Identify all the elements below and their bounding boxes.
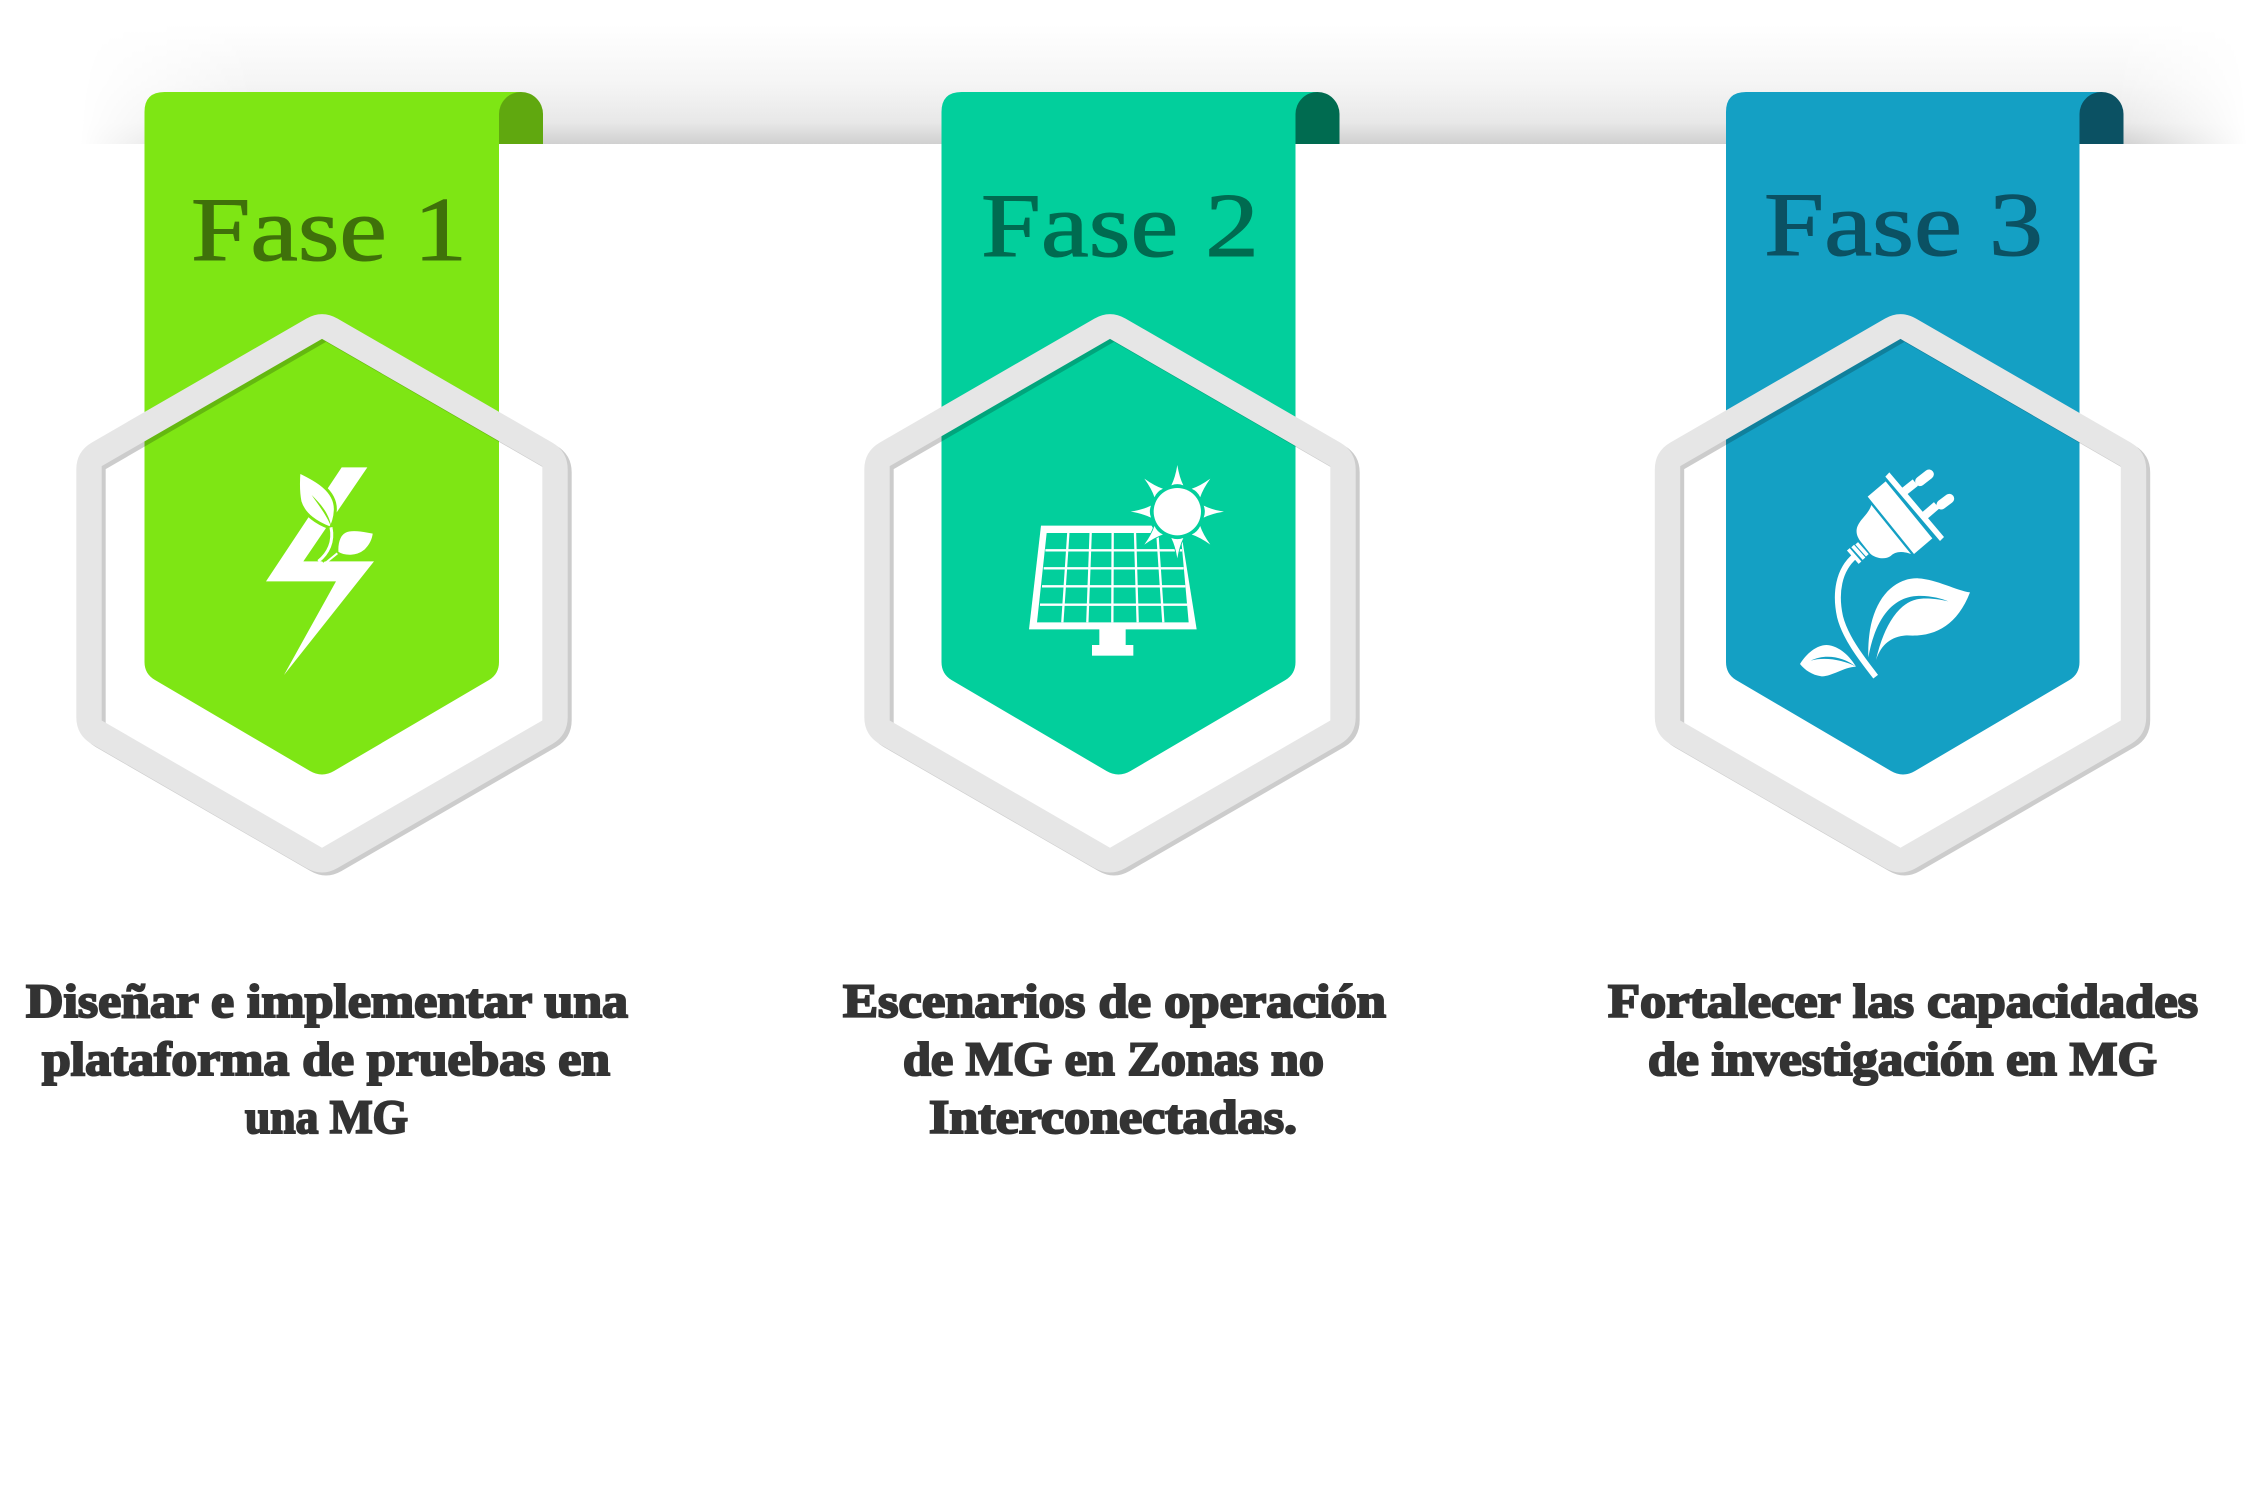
text block: fase 1 description: plataforma de pruebas en <box>42 1033 610 1086</box>
text block: fase 3 description: Fortalecer las capacidades <box>1608 975 2198 1028</box>
ribbon fold: fase 3 <box>2080 92 2124 144</box>
hexagon ring: fase 1 <box>76 314 572 876</box>
hexagon ring: fase 2 <box>864 314 1360 876</box>
text block: fase 1 description: Diseñar e implementar una <box>26 975 628 1028</box>
icon: solar panel and sun <box>1029 465 1224 656</box>
ribbon: fase 3 <box>1726 92 2102 774</box>
ribbon fold: fase 1 <box>499 92 543 144</box>
text block: fase 2 description <box>843 975 1386 1144</box>
text block: fase 2 description: Escenarios de operación <box>843 975 1386 1028</box>
text block: fase 1 description <box>26 975 628 1144</box>
heading: Fase 2: Fase 2 <box>981 175 1259 276</box>
panel: fase 3 <box>1655 92 2150 876</box>
heading: Fase 1: Fase 1 <box>191 179 467 280</box>
icon: lightning bolt with leaves <box>266 467 374 675</box>
heading: Fase 3: Fase 3 <box>1764 174 2043 275</box>
text block: fase 3 description <box>1608 975 2198 1086</box>
ribbon: fase 1 <box>144 92 521 774</box>
icon: plug with leaves <box>1800 472 1970 677</box>
text block: fase 3 description: de investigación en MG <box>1648 1033 2157 1086</box>
text block: fase 2 description: de MG en Zonas no <box>903 1033 1324 1086</box>
panel: fase 2 <box>864 92 1360 876</box>
ribbon: fase 2 <box>942 92 1318 774</box>
panel: fase 1 <box>76 92 572 876</box>
text block: fase 1 description: una MG <box>245 1091 408 1144</box>
ribbon fold: fase 2 <box>1296 92 1340 144</box>
hexagon ring: fase 3 <box>1655 314 2150 876</box>
text block: fase 2 description: Interconectadas. <box>929 1091 1297 1144</box>
shaded top bar <box>112 72 2224 144</box>
